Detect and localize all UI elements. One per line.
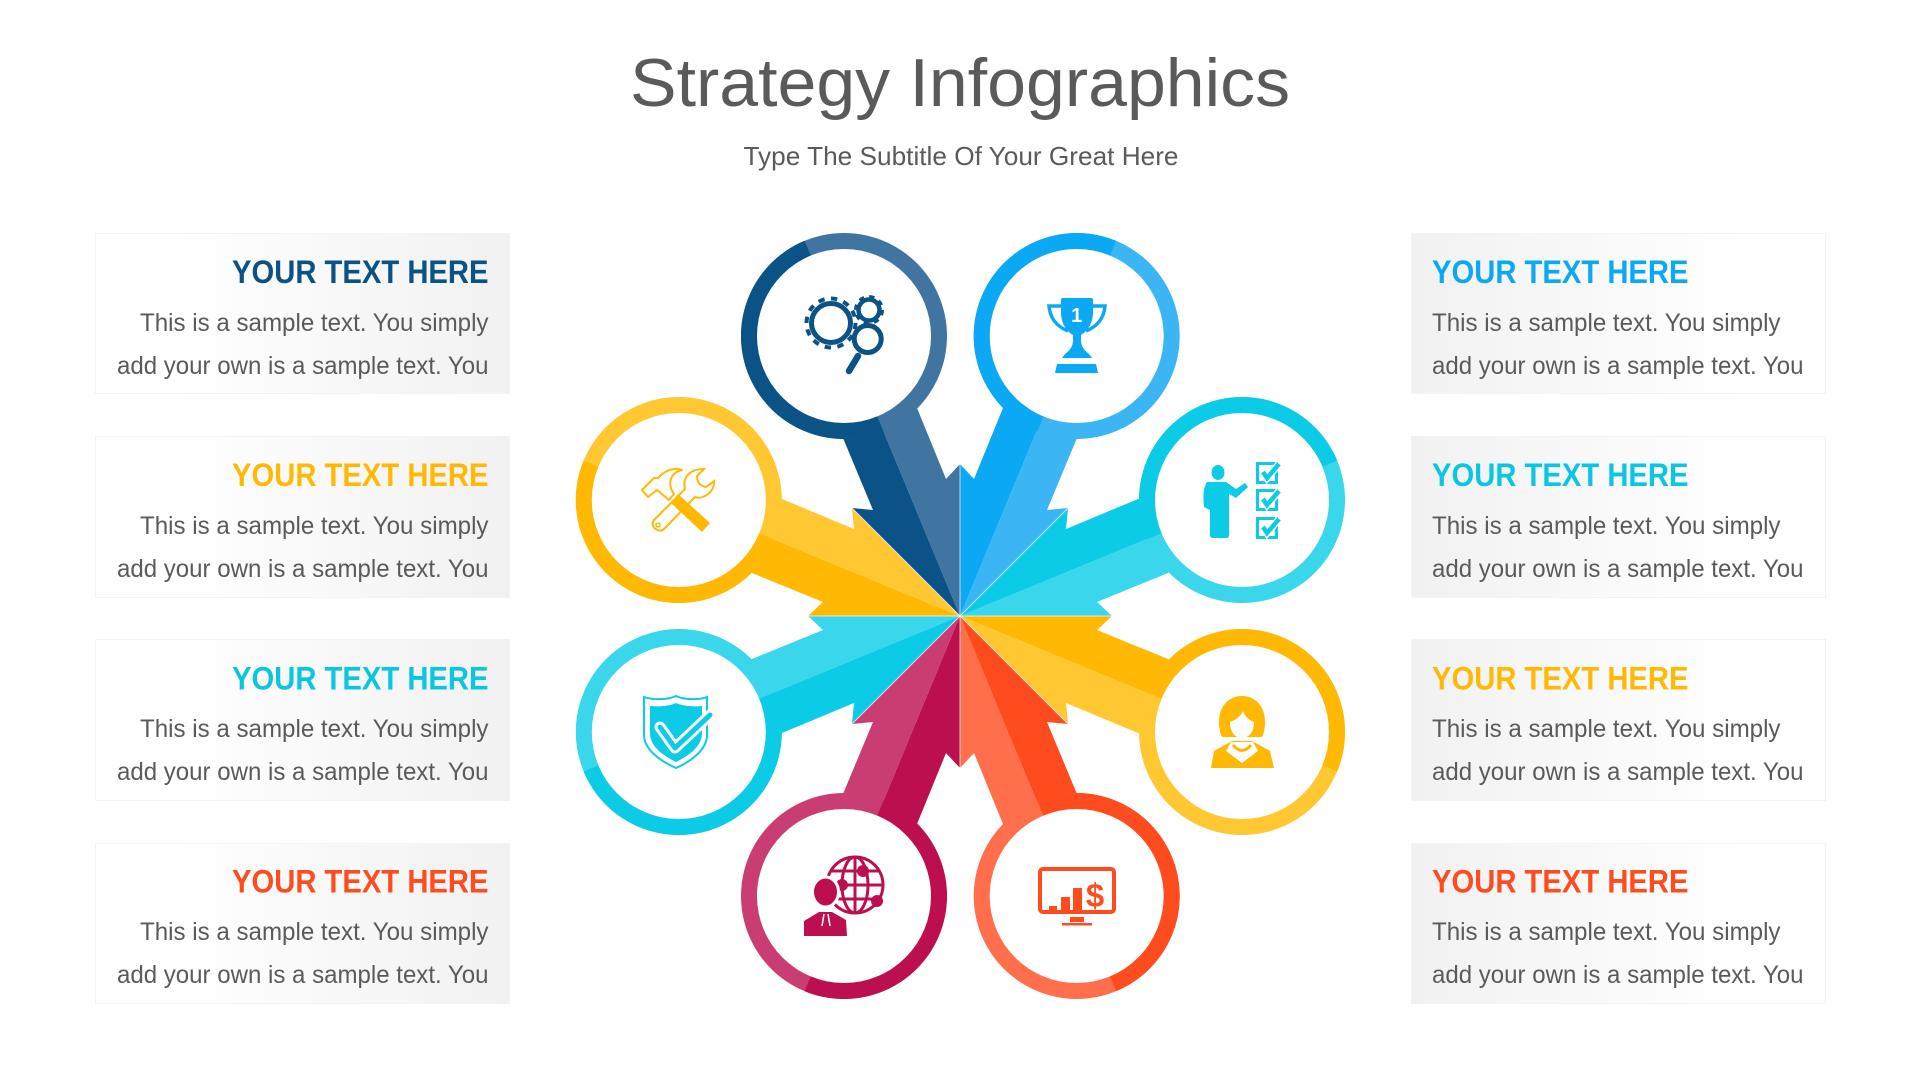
- heading: YOUR TEXT HERE: [1432, 254, 1688, 290]
- panel: right 3 yellow: [1412, 640, 1826, 800]
- ring: orange: [974, 793, 1180, 999]
- body text: This is a sample text. You simply: [140, 715, 489, 743]
- body text: [1432, 918, 1804, 989]
- icon: person with globe: [804, 857, 883, 936]
- subtitle: Type The Subtitle Of Your Great Here: [744, 141, 1178, 171]
- icon: monitor with chart: $: [1086, 877, 1104, 914]
- body text: This is a sample text. You simply: [140, 512, 489, 540]
- ring: navy: [741, 233, 947, 439]
- icon: monitor with chart: [1040, 869, 1114, 926]
- icon: trophy: 1: [1071, 305, 1082, 327]
- arrow: crimson: [843, 616, 960, 896]
- icon: hammer and wrench: [642, 469, 714, 532]
- arrow: cyan left: [678, 616, 960, 733]
- body text: This is a sample text. You simply: [140, 918, 489, 946]
- body text: This is a sample text. You simply: [1432, 512, 1781, 540]
- body text: [117, 512, 489, 583]
- body text: [117, 309, 489, 380]
- body text: This is a sample text. You simply: [1432, 309, 1781, 337]
- body text: add your own is a sample text. You: [117, 555, 488, 583]
- ring: crimson: [741, 793, 947, 999]
- body text: [1432, 512, 1804, 583]
- arrow: yellow left: [678, 499, 960, 616]
- body text: add your own is a sample text. You: [117, 758, 488, 786]
- icon: woman: [1211, 696, 1274, 768]
- panel: left 3 cyan: [96, 640, 510, 800]
- arrow: cyan right: [960, 499, 1242, 616]
- icon: gears and magnifier: [806, 296, 882, 371]
- arrow: blue: [960, 336, 1077, 616]
- heading: YOUR TEXT HERE: [232, 864, 488, 900]
- body text: add your own is a sample text. You: [1432, 961, 1804, 989]
- panel: right 4 orange: [1412, 844, 1826, 1004]
- ring: cyan left: [576, 629, 782, 835]
- heading: YOUR TEXT HERE: [1432, 864, 1688, 900]
- panel: right 2 cyan: [1412, 436, 1826, 598]
- panel: left 1 navy: [96, 234, 510, 394]
- body text: add your own is a sample text. You: [117, 352, 488, 380]
- body text: add your own is a sample text. You: [1432, 555, 1804, 583]
- arrow: navy: [843, 336, 960, 616]
- ring: blue: [974, 233, 1180, 439]
- ring: cyan right: [1139, 397, 1345, 603]
- body text: This is a sample text. You simply: [1432, 918, 1781, 946]
- body text: [117, 715, 489, 786]
- icon: shield check: [644, 696, 710, 768]
- panel: left 4 orange: [96, 844, 510, 1004]
- body text: add your own is a sample text. You: [1432, 352, 1804, 380]
- panel: right 1 blue: [1412, 234, 1826, 394]
- body text: [1432, 715, 1804, 786]
- ring: yellow left: [576, 397, 782, 603]
- panel: left 2 yellow: [96, 436, 510, 598]
- arrow: yellow right: [960, 616, 1242, 733]
- body text: [1432, 309, 1804, 380]
- heading: YOUR TEXT HERE: [232, 660, 488, 696]
- body text: add your own is a sample text. You: [1432, 758, 1804, 786]
- body text: This is a sample text. You simply: [140, 309, 489, 337]
- heading: YOUR TEXT HERE: [232, 457, 488, 493]
- heading: YOUR TEXT HERE: [1432, 660, 1688, 696]
- title: Strategy Infographics: [630, 45, 1290, 121]
- body text: This is a sample text. You simply: [1432, 715, 1781, 743]
- icon: trophy: [1049, 298, 1105, 373]
- heading: YOUR TEXT HERE: [1432, 457, 1688, 493]
- arrow: orange: [960, 616, 1077, 896]
- heading: YOUR TEXT HERE: [232, 254, 488, 290]
- icon: person with checklist: [1203, 464, 1279, 538]
- radial diagram: [576, 233, 1345, 999]
- body text: [117, 918, 489, 989]
- body text: add your own is a sample text. You: [117, 961, 488, 989]
- ring: yellow right: [1139, 629, 1345, 835]
